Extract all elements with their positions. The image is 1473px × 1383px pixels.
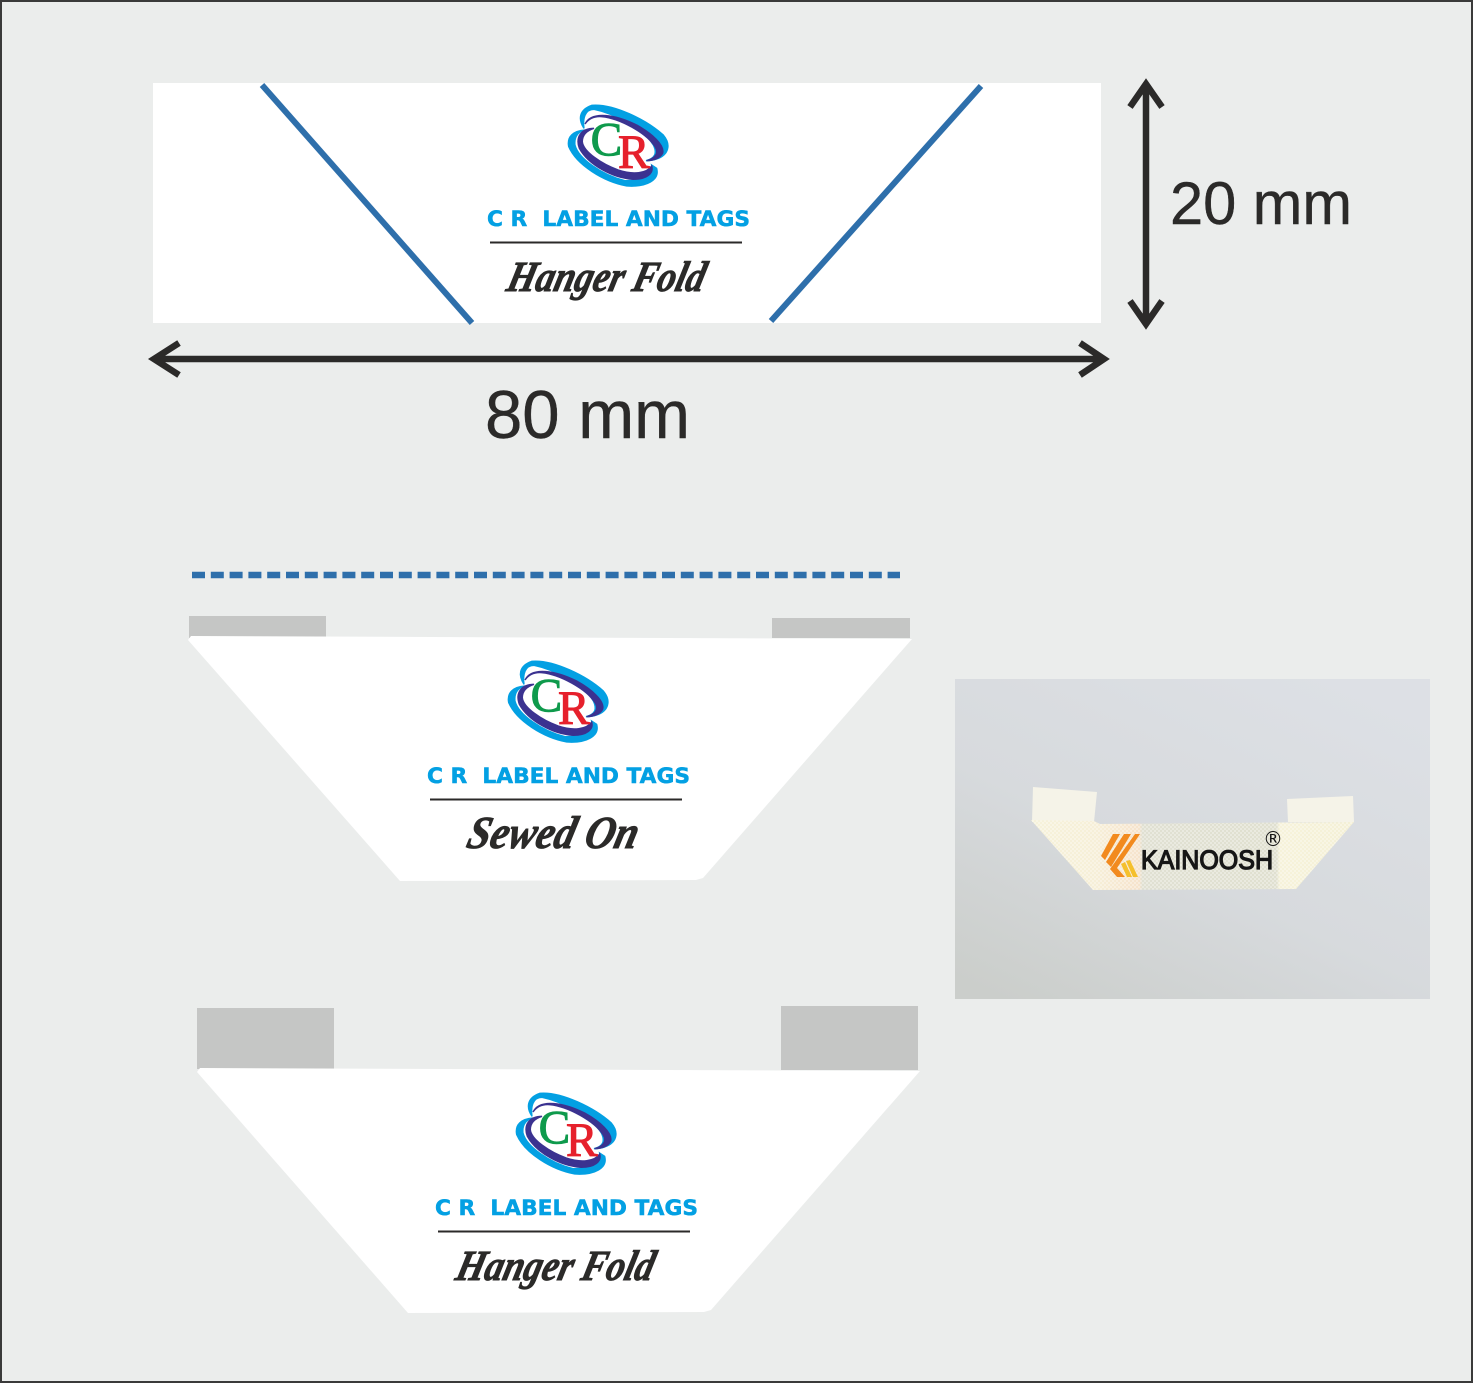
panel: sewed on label: [188, 616, 912, 881]
logo: CR: R: [566, 1115, 598, 1167]
right fabric tab: [1287, 796, 1354, 822]
script caption: Sewed On: [462, 808, 645, 859]
logo: CR: [508, 661, 608, 742]
woven label body: [1031, 820, 1354, 890]
panel: hanger fold label: [197, 1006, 920, 1313]
divider: [430, 798, 682, 800]
brand name: C R LABEL AND TAGS: [487, 207, 750, 231]
woven brand name: KAINOOSH: [1141, 845, 1273, 875]
width label: 80 mm: [485, 377, 690, 453]
left fabric tab: [1032, 787, 1097, 822]
logo: CR: C: [539, 1103, 570, 1155]
dashed fold line: [192, 572, 900, 578]
right tab: [781, 1006, 918, 1070]
label body: [153, 83, 1101, 323]
right tab: [772, 618, 910, 638]
left tab: [189, 616, 326, 638]
logo: CR: R: [558, 683, 590, 735]
logo: CR: C: [531, 671, 562, 723]
logo: CR: [516, 1093, 616, 1174]
arrow: width dimension: [154, 343, 1104, 375]
brand mark: orange K: [1101, 834, 1140, 877]
brand name: C R LABEL AND TAGS: [427, 764, 690, 788]
photo background: [955, 679, 1430, 999]
script caption: Hanger Fold: [451, 1243, 661, 1290]
logo: CR: [568, 105, 668, 186]
label body: [197, 1068, 920, 1313]
panel: flat label: [153, 83, 1101, 323]
woven texture: [1031, 820, 1354, 890]
left tab: [197, 1008, 334, 1069]
right fold line: [771, 86, 981, 321]
divider: [438, 1230, 690, 1232]
logo: CR: R: [618, 127, 650, 179]
registered mark: ®: [1263, 827, 1283, 851]
brand name: C R LABEL AND TAGS: [435, 1196, 698, 1220]
panel: product photo: [955, 679, 1430, 999]
left fold line: [262, 85, 472, 323]
divider: [490, 242, 742, 244]
label body: [188, 636, 912, 881]
height label: 20 mm: [1170, 170, 1352, 237]
arrow: height dimension: [1130, 84, 1162, 324]
logo: CR: C: [591, 115, 622, 167]
script caption: Hanger Fold: [502, 254, 712, 301]
